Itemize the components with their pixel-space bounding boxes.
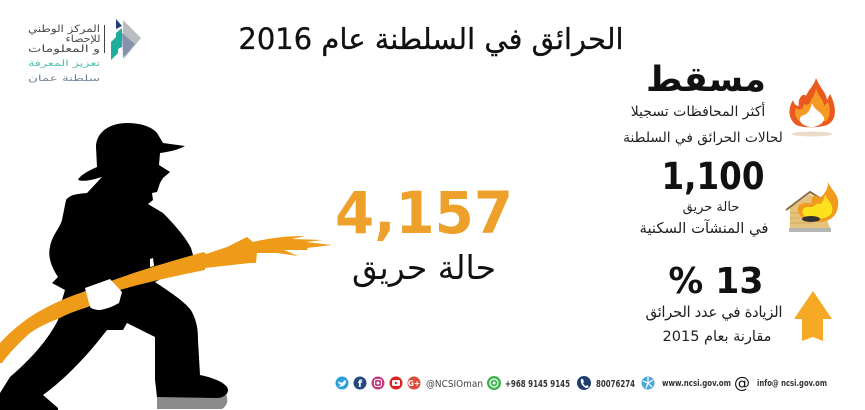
text: compared to 2015: مقارنة بعام 2015 — [663, 329, 771, 345]
main number: 4,157 — [335, 179, 513, 247]
text: most recorded governorates: أكثر المحافظات تسجيلا — [631, 102, 765, 120]
logo name — [28, 24, 100, 55]
logo name: للإحصاء — [66, 34, 100, 45]
main label: حالة حريق — [352, 248, 496, 288]
icon: whatsapp — [487, 376, 501, 390]
logo: NCSI — [28, 19, 141, 84]
icon: instagram — [372, 376, 384, 390]
number: 1,100: 1,100 — [662, 155, 764, 198]
hose gap — [150, 258, 154, 267]
icon: phone — [577, 376, 591, 390]
text: fire cases in the Sultanate: لحالات الحرائق في السلطنة — [623, 130, 783, 146]
boot shadow — [157, 394, 227, 409]
icon: youtube — [390, 376, 402, 390]
icon: flame — [789, 78, 835, 136]
icon: twitter — [336, 376, 348, 390]
logo tagline: تعزيز المعرفة — [28, 59, 101, 69]
number: 13 %: % 13 — [668, 261, 764, 302]
panel: Muscat — [623, 60, 835, 146]
logo country: سلطنة عمان — [28, 74, 100, 84]
handle: @NCSIOman — [426, 379, 483, 390]
email: info@ ncsi.gov.om — [757, 379, 827, 389]
icon: facebook — [354, 376, 366, 390]
logo name: المركز الوطني — [28, 24, 100, 35]
text: in residential buildings: في المنشآت السكنية — [640, 219, 768, 237]
icon: up arrow — [794, 291, 832, 341]
icon: facebook: f — [358, 379, 363, 390]
panel: increase — [646, 261, 832, 345]
glove — [85, 279, 122, 310]
icon: burning house — [786, 182, 838, 232]
icon: google plus — [408, 376, 420, 390]
logo divider — [104, 25, 105, 53]
panel: residential fires — [640, 155, 838, 237]
silhouette — [0, 123, 228, 410]
toll-free number: 80076274 — [596, 379, 635, 390]
hose — [0, 236, 332, 363]
icon: globe — [642, 376, 654, 390]
heading: Muscat: مسقط — [646, 60, 766, 100]
phone number: +968 9145 9145 — [505, 379, 570, 390]
logo mark — [111, 19, 141, 60]
text: fire case: حالة حريق — [683, 200, 739, 215]
text: increase in number of fires: الزيادة في عدد الحرائق — [646, 303, 782, 322]
contact footer — [336, 373, 827, 392]
logo name: و المعلومات — [28, 44, 100, 55]
icon: google plus: G+ — [408, 379, 420, 388]
website: www.ncsi.gov.om — [662, 379, 731, 389]
icon: at sign: @ — [734, 373, 750, 392]
title: الحرائق في السلطنة عام 2016 — [238, 22, 624, 57]
firefighter illustration — [0, 123, 332, 410]
main stat — [335, 179, 513, 288]
